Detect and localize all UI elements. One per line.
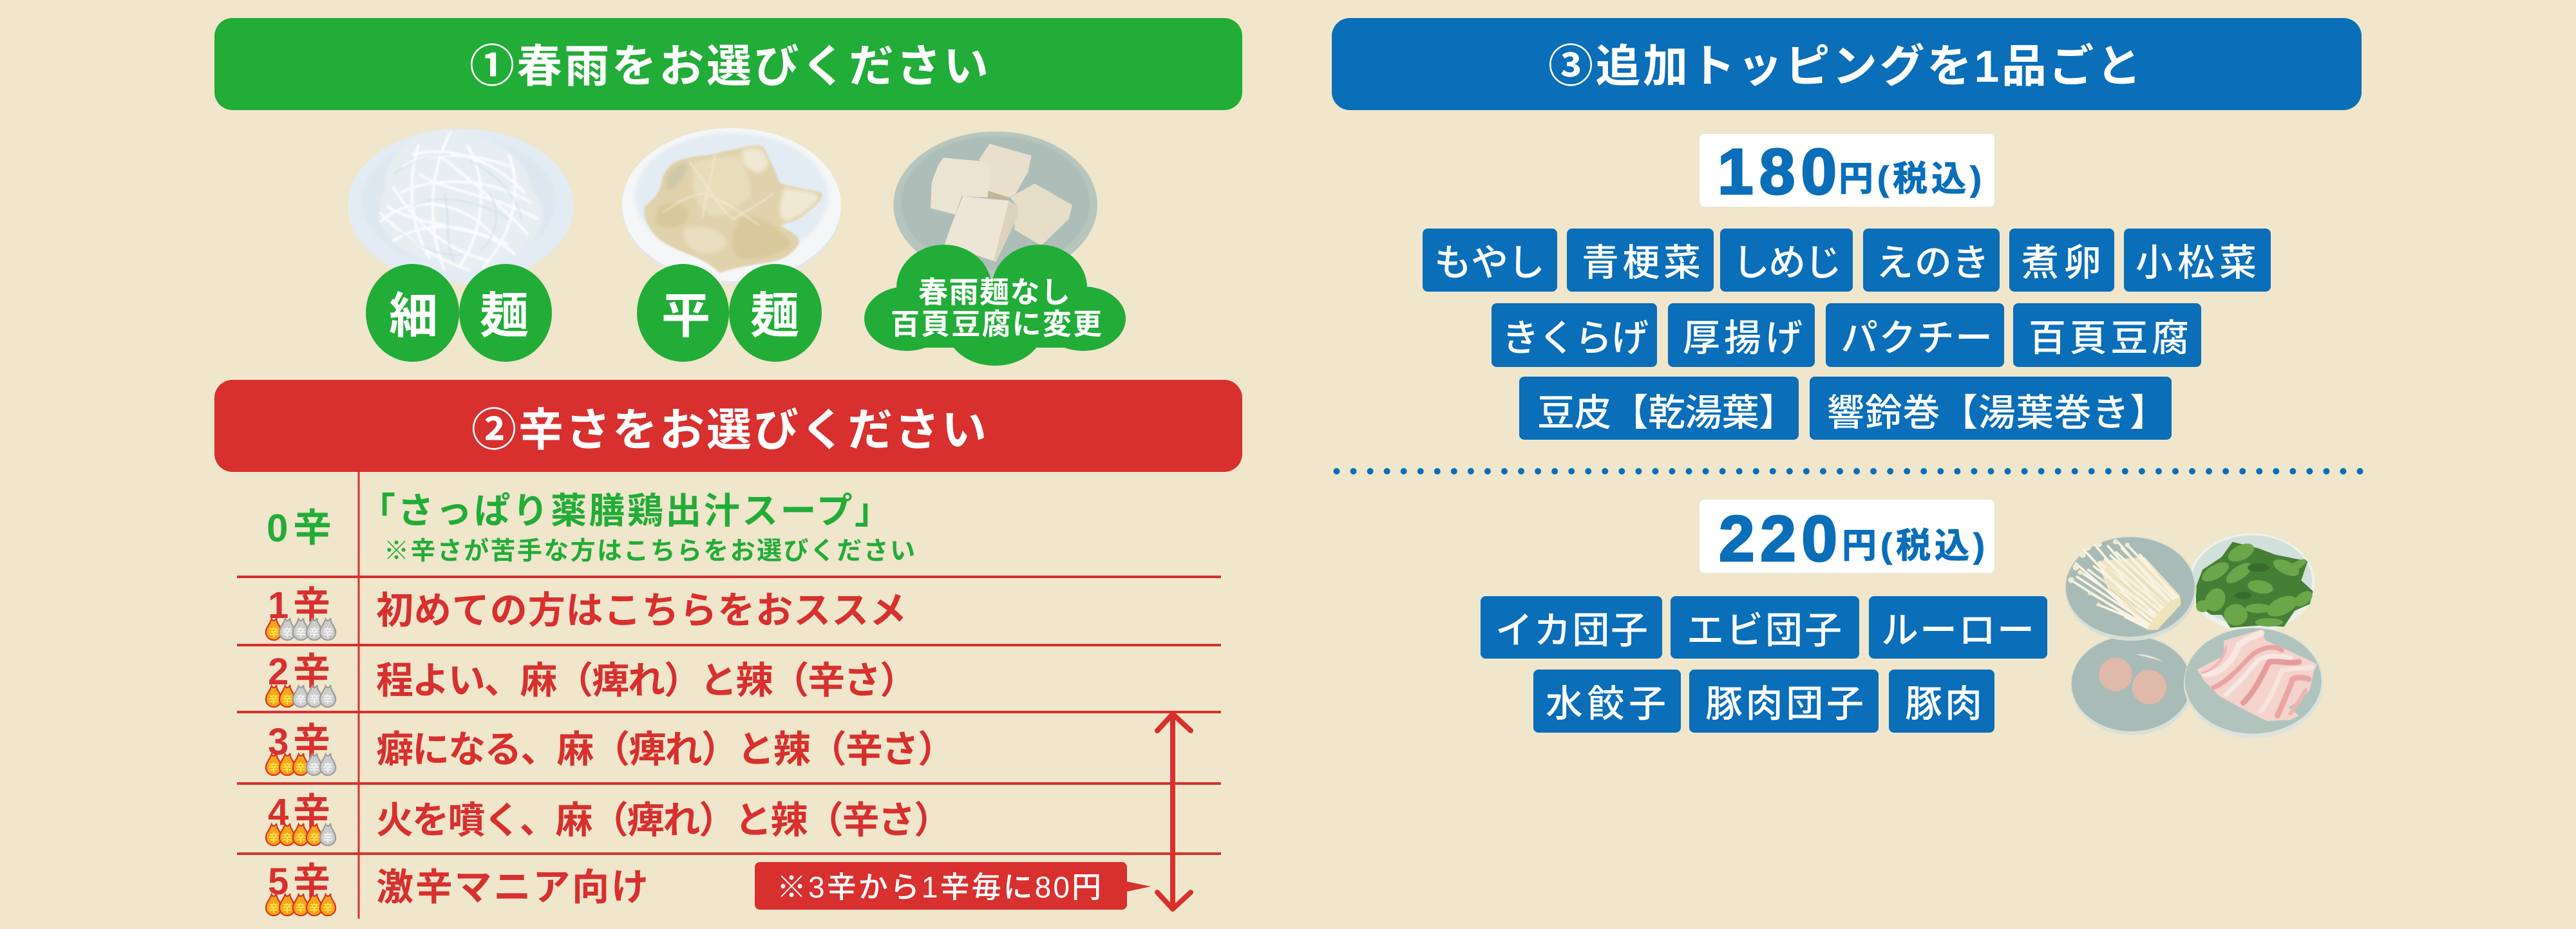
label: flat noodles: [637, 264, 822, 362]
icon: spice meter 2 of 5: 辛: [309, 694, 319, 706]
row: level 3: 癖になる、麻（痺れ）と辣（辛さ）: [376, 729, 955, 771]
label: no noodles, change to tofu skin: 春雨麺なし: [918, 276, 1070, 309]
tags: 220 yen toppings: [1481, 596, 2047, 733]
tags: 220 yen toppings: 豚肉: [1905, 683, 1982, 725]
panel: noodle choice: [214, 18, 1242, 366]
row: level 4: 火を噴く、麻（痺れ）と辣（辛さ）: [376, 800, 951, 841]
icon: spice meter 3 of 5: 辛: [269, 762, 279, 774]
tags: 220 yen toppings: 水餃子: [1546, 683, 1666, 725]
row: level 1: 1辛: [268, 585, 330, 626]
icon: spice meter 2 of 5: 辛: [269, 694, 279, 706]
icon: spice meter 1 of 5: 辛: [323, 627, 333, 639]
price badge: 180 yen: 円(税込): [1839, 160, 1982, 198]
icon: spice meter 5 of 5: 辛: [282, 903, 292, 914]
label: flat noodles: 平: [661, 289, 710, 344]
photo: topping plates: [2065, 533, 2324, 738]
icon: spice meter 3 of 5: [266, 753, 336, 775]
icon: spice meter 1 of 5: [266, 618, 336, 640]
label: flat noodles: 麺: [750, 289, 799, 344]
tags: 220 yen toppings: エビ団子: [1687, 610, 1842, 652]
plate: enoki: [2065, 536, 2197, 641]
row: level 0: ※辛さが苦手な方はこちらをお選びください: [384, 538, 915, 565]
icon: spice meter 5 of 5: 辛: [309, 903, 319, 914]
icon: spice meter 5 of 5: 辛: [269, 903, 279, 914]
plate: pork: [2184, 628, 2324, 738]
tags: 180 yen toppings: きくらげ: [1502, 317, 1649, 359]
photo: thin noodles bowl: [348, 129, 573, 285]
tags: 180 yen toppings: もやし: [1434, 242, 1545, 284]
tags: 180 yen toppings: 豆皮【乾湯葉】: [1537, 392, 1796, 434]
tags: 180 yen toppings: 百頁豆腐: [2029, 317, 2189, 359]
tags: 220 yen toppings: 豚肉団子: [1705, 683, 1864, 725]
callout: surcharge note: [755, 862, 1151, 910]
row: level 2: 程よい、麻（痺れ）と辣（辛さ）: [376, 660, 917, 702]
icon: spice meter 3 of 5: 辛: [309, 762, 319, 774]
row: level 5: [266, 861, 649, 915]
row: level 5: 激辛マニア向け: [376, 867, 649, 908]
icon: spice meter 4 of 5: 辛: [282, 832, 292, 844]
row: level 3: [266, 721, 955, 775]
tags: 220 yen toppings: イカ団子: [1495, 610, 1648, 652]
icon: spice meter 1 of 5: 辛: [282, 627, 292, 639]
tags: 220 yen toppings: ルーロー: [1881, 610, 2034, 652]
plate: meatballs: [2071, 635, 2193, 735]
icon: spice meter 1 of 5: 辛: [269, 627, 279, 639]
tags: 180 yen toppings: 小松菜: [2136, 242, 2257, 284]
icon: spice meter 3 of 5: 辛: [282, 762, 292, 774]
heading: toppings per item: ③追加トッピングを1品ごと: [1548, 41, 2141, 91]
panel: spice level: [214, 380, 1242, 919]
label: no noodles, change to tofu skin: [864, 245, 1126, 366]
row: level 2: [266, 651, 917, 707]
row: level 0: [267, 491, 915, 565]
tags: 180 yen toppings: えのき: [1876, 242, 1989, 284]
row: level 4: [266, 791, 951, 845]
tags: 180 yen toppings: 厚揚げ: [1683, 317, 1803, 359]
icon: spice meter 3 of 5: 辛: [296, 762, 306, 774]
icon: spice meter 4 of 5: 辛: [323, 832, 333, 844]
heading: choose spice level: [214, 380, 1242, 472]
tags: 180 yen toppings: しめじ: [1732, 242, 1842, 284]
photo: tofu plate: [893, 131, 1097, 278]
icon: spice meter 4 of 5: 辛: [269, 832, 279, 844]
label: thin noodles: 細: [389, 289, 438, 344]
panel: extra toppings: [1332, 18, 2362, 738]
row: level 4: 4辛: [268, 791, 330, 833]
icon: spice meter 5 of 5: [266, 894, 336, 915]
photo: flat noodles bowl: [622, 128, 841, 285]
icon: spice meter 2 of 5: 辛: [282, 694, 292, 706]
label: thin noodles: [366, 264, 552, 362]
price badge: 220 yen: [1700, 500, 1994, 575]
icon: spice meter 5 of 5: 辛: [296, 903, 306, 914]
icon: spice meter 3 of 5: 辛: [323, 762, 333, 774]
table rules: [237, 472, 1221, 919]
row: level 5: 5辛: [268, 861, 330, 903]
label: thin noodles: 麺: [480, 289, 529, 344]
heading: toppings per item: [1332, 18, 2362, 110]
plate: herbs: [2188, 533, 2315, 632]
row: level 3: 3辛: [268, 721, 330, 763]
icon: spice meter 2 of 5: [266, 685, 336, 707]
icon: spice meter 1 of 5: 辛: [309, 627, 319, 639]
heading: choose noodles: ①春雨をお選びください: [469, 41, 989, 91]
tags: 180 yen toppings: 響鈴巻【湯葉巻き】: [1827, 392, 2167, 434]
label: no noodles, change to tofu skin: 百頁豆腐に変更: [891, 308, 1102, 341]
tags: 180 yen toppings: パクチー: [1841, 317, 1993, 359]
tags: 180 yen toppings: [1423, 229, 2271, 440]
row: level 1: [266, 585, 907, 640]
heading: choose noodles: [214, 18, 1242, 110]
callout: surcharge note: ※3辛から1辛毎に80円: [777, 870, 1101, 904]
icon: spice meter 1 of 5: 辛: [296, 627, 306, 639]
icon: spice meter 4 of 5: 辛: [296, 832, 306, 844]
icon: spice meter 2 of 5: 辛: [323, 694, 333, 706]
row: level 0: 「さっぱり薬膳鶏出汁スープ」: [359, 491, 891, 531]
row: level 0: 0辛: [267, 507, 332, 550]
row: level 2: 2辛: [268, 651, 330, 693]
tags: 180 yen toppings: 青梗菜: [1582, 242, 1701, 284]
icon: spice meter 4 of 5: [266, 823, 336, 845]
arrow: surcharge range: [1157, 714, 1191, 909]
heading: choose spice level: ②辛さをお選びください: [471, 405, 987, 455]
price badge: 180 yen: [1700, 134, 1994, 208]
icon: spice meter 4 of 5: 辛: [309, 832, 319, 844]
row: level 1: 初めての方はこちらをおススメ: [376, 590, 907, 632]
price badge: 180 yen: 180: [1718, 136, 1837, 208]
price badge: 220 yen: 円(税込): [1842, 527, 1985, 565]
tags: 180 yen toppings: 煮卵: [2022, 242, 2101, 284]
price badge: 220 yen: 220: [1719, 503, 1837, 575]
icon: spice meter 2 of 5: 辛: [296, 694, 306, 706]
icon: spice meter 5 of 5: 辛: [323, 903, 333, 914]
